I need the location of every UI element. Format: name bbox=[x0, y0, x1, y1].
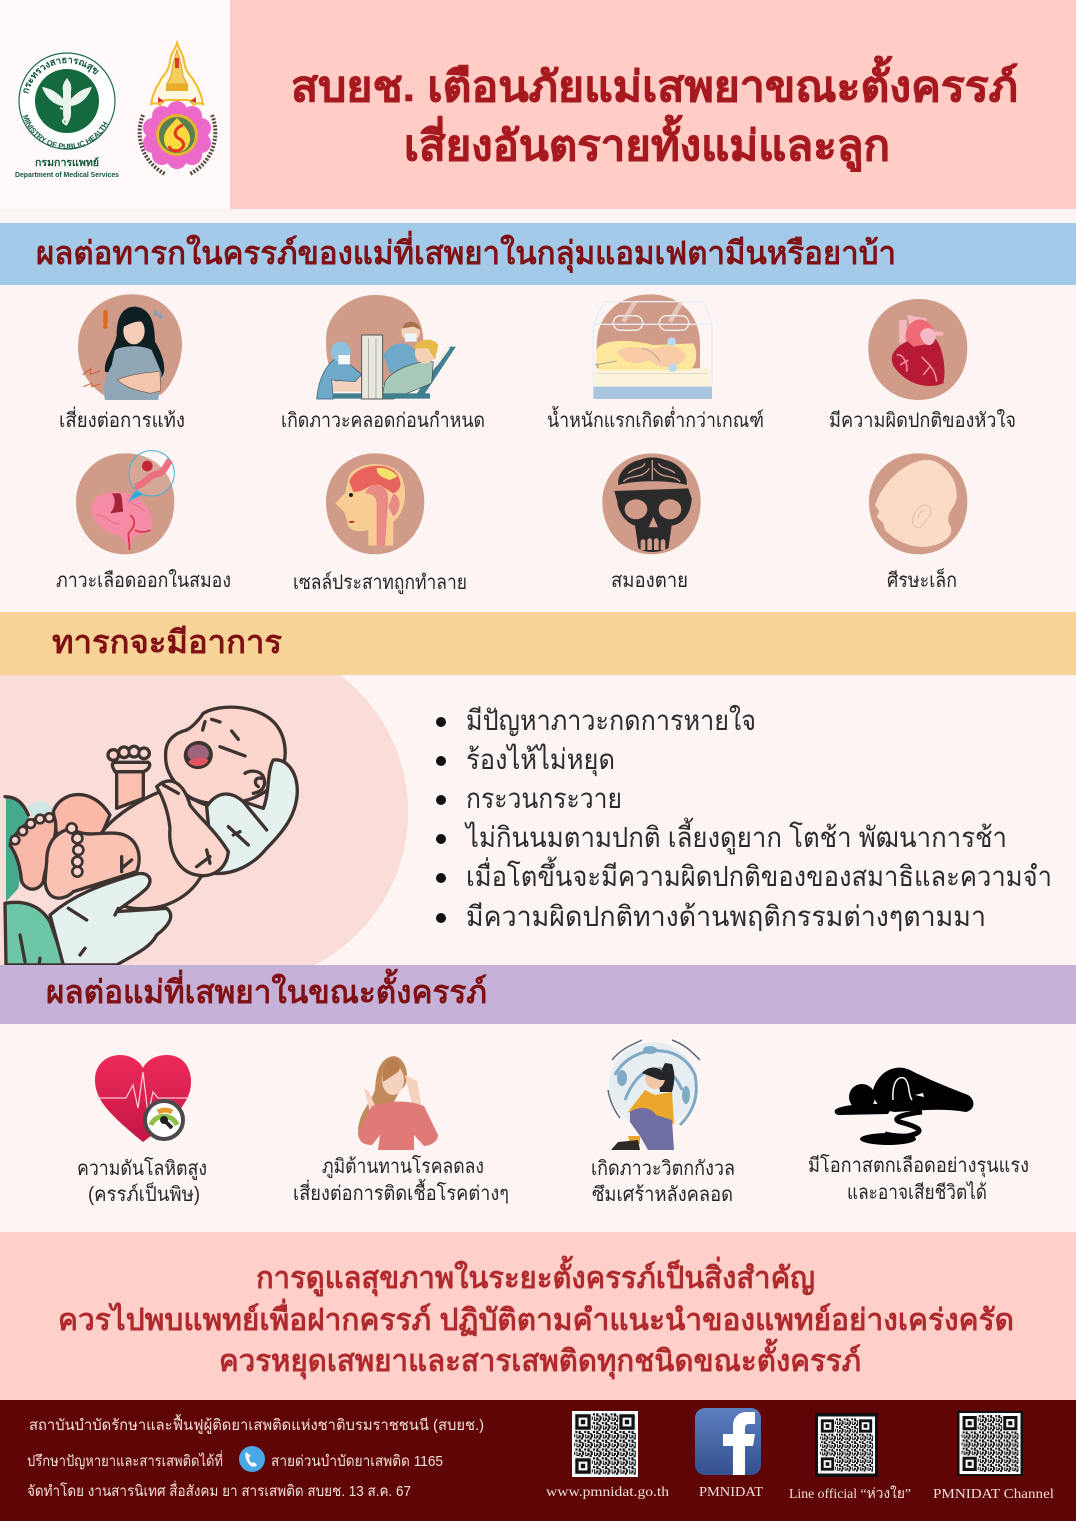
icon: woman with headache bbox=[358, 1056, 438, 1150]
symptoms list: ร้องไห้ไม่หยุด bbox=[466, 744, 615, 777]
label: (ครรภ์เป็นพิษ) bbox=[88, 1181, 200, 1206]
label bbox=[808, 1154, 1029, 1204]
heading: infant symptoms: ทารกจะมีอาการ bbox=[52, 624, 282, 660]
logo: department of medical services: กรมการแพทย์ bbox=[35, 157, 99, 169]
icon: pregnant woman bbox=[78, 294, 182, 400]
panel: effects on mother bbox=[0, 965, 1076, 1206]
label: ความดันโลหิตสูง bbox=[77, 1157, 207, 1181]
label: เสี่ยงต่อการติดเชื้อโรคต่างๆ bbox=[293, 1179, 509, 1205]
label bbox=[293, 1155, 509, 1205]
footer contact text: สายด่วนบำบัดยาเสพติด 1165 bbox=[271, 1453, 443, 1470]
logo: institute lotus and spire bbox=[140, 43, 215, 174]
icon: microcephaly bbox=[869, 453, 967, 554]
label: เซลล์ประสาทถูกทำลาย bbox=[293, 571, 467, 595]
icon: facebook bbox=[695, 1408, 763, 1500]
icon: preterm delivery bbox=[317, 295, 456, 399]
panel: care message: ควรหยุดเสพยาและสารเสพติดทุกชนิดขณะตั้งครรภ์ bbox=[219, 1338, 861, 1380]
title bbox=[291, 55, 1018, 172]
qr code: channel: PMNIDAT Channel bbox=[933, 1487, 1054, 1502]
label: ศีรษะเล็ก bbox=[887, 567, 957, 592]
footer contact text bbox=[27, 1414, 484, 1500]
logo: department of medical services: MINISTRY OF PUBLIC HEALTH bbox=[23, 114, 108, 149]
qr code: channel bbox=[933, 1411, 1054, 1502]
qr code: website: www.pmnidat.go.th bbox=[546, 1485, 669, 1500]
panel: care message bbox=[0, 1232, 1076, 1400]
icon: postpartum hemorrhage silhouette bbox=[835, 1068, 973, 1145]
panel: footer bbox=[0, 1400, 1076, 1521]
label: น้ำหนักแรกเกิดต่ำกว่าเกณฑ์ bbox=[547, 406, 764, 432]
label: มีโอกาสตกเลือดอย่างรุนแรง bbox=[808, 1154, 1029, 1178]
footer contact text: สถาบันบำบัดรักษาและฟื้นฟูผู้ติดยาเสพติดแห่งชาติบรมราชชนนี (สบยช.) bbox=[29, 1414, 484, 1434]
icon: premature infant in incubator bbox=[593, 294, 712, 399]
icon: brain death skull bbox=[602, 453, 701, 554]
icon: brain hemorrhage bbox=[76, 451, 174, 554]
symptoms list bbox=[436, 704, 1052, 932]
label: สมองตาย bbox=[611, 570, 688, 592]
title: เสี่ยงอันตรายทั้งแม่และลูก bbox=[404, 114, 890, 172]
icon: high blood pressure heart bbox=[95, 1055, 191, 1142]
title: สบยช. เตือนภัยแม่เสพยาขณะตั้งครรภ์ bbox=[291, 55, 1018, 110]
qr code: line official bbox=[789, 1413, 911, 1502]
panel: care message: ควรไปพบแพทย์เพื่อฝากครรภ์ ปฏิบัติตามคำแนะนำของแพทย์อย่างเคร่งครัด bbox=[58, 1298, 1014, 1337]
icon: facebook: PMNIDAT bbox=[699, 1485, 763, 1500]
panel: effects on fetus bbox=[0, 223, 1076, 595]
label bbox=[77, 1157, 207, 1206]
icon: heart bbox=[868, 299, 967, 400]
qr code: line official: Line official “ห่วงใย” bbox=[789, 1485, 911, 1502]
logo: department of medical services: กระทรวงสาธารณสุข bbox=[23, 58, 99, 94]
label: ภูมิต้านทานโรคลดลง bbox=[322, 1155, 484, 1179]
label: เสี่ยงต่อการแท้ง bbox=[59, 406, 185, 432]
symptoms list: กระวนกระวาย bbox=[466, 783, 622, 814]
symptoms list: มีปัญหาภาวะกดการหายใจ bbox=[466, 704, 756, 736]
label: ซึมเศร้าหลังคลอด bbox=[592, 1184, 733, 1206]
panel: care message: การดูแลสุขภาพในระยะตั้งครรภ์เป็นสิ่งสำคัญ bbox=[256, 1255, 815, 1297]
symptoms list: มีความผิดปกติทางด้านพฤติกรรมต่างๆตามมา bbox=[466, 901, 986, 932]
illustration: crying newborn held by gloved hands bbox=[0, 675, 408, 965]
symptoms list: ไม่กินนมตามปกติ เลี้ยงดูยาก โตช้า พัฒนาการช้า bbox=[464, 817, 1007, 855]
label bbox=[591, 1158, 735, 1206]
label: เกิดภาวะวิตกกังวล bbox=[591, 1158, 735, 1180]
qr code: website bbox=[546, 1411, 669, 1500]
label: ภาวะเลือดออกในสมอง bbox=[56, 569, 231, 592]
heading: effects on mother: ผลต่อแม่ที่เสพยาในขณะตั้งครรภ์ bbox=[46, 968, 487, 1010]
logo: department of medical services bbox=[15, 52, 119, 179]
panel: infant symptoms bbox=[0, 612, 1076, 984]
label: และอาจเสียชีวิตได้ bbox=[847, 1181, 987, 1204]
label: เกิดภาวะคลอดก่อนกำหนด bbox=[281, 410, 485, 432]
label: มีความผิดปกติของหัวใจ bbox=[829, 409, 1016, 432]
icon: anxious seated woman bbox=[608, 1040, 700, 1150]
footer contact text: ปรึกษาปัญหายาและสารเสพติดได้ที่ bbox=[27, 1450, 223, 1470]
icon: nerve cell damage bbox=[326, 453, 424, 554]
logo: department of medical services: Department of Medical Services bbox=[15, 172, 119, 179]
heading: effects on fetus: ผลต่อทารกในครรภ์ของแม่ที่เสพยาในกลุ่มแอมเฟตามีนหรือยาบ้า bbox=[36, 230, 896, 274]
panel: header bbox=[15, 0, 1076, 209]
footer contact text: จัดทำโดย งานสารนิเทศ สื่อสังคม ยา สารเสพติด สบยช. 13 ส.ค. 67 bbox=[27, 1480, 411, 1500]
